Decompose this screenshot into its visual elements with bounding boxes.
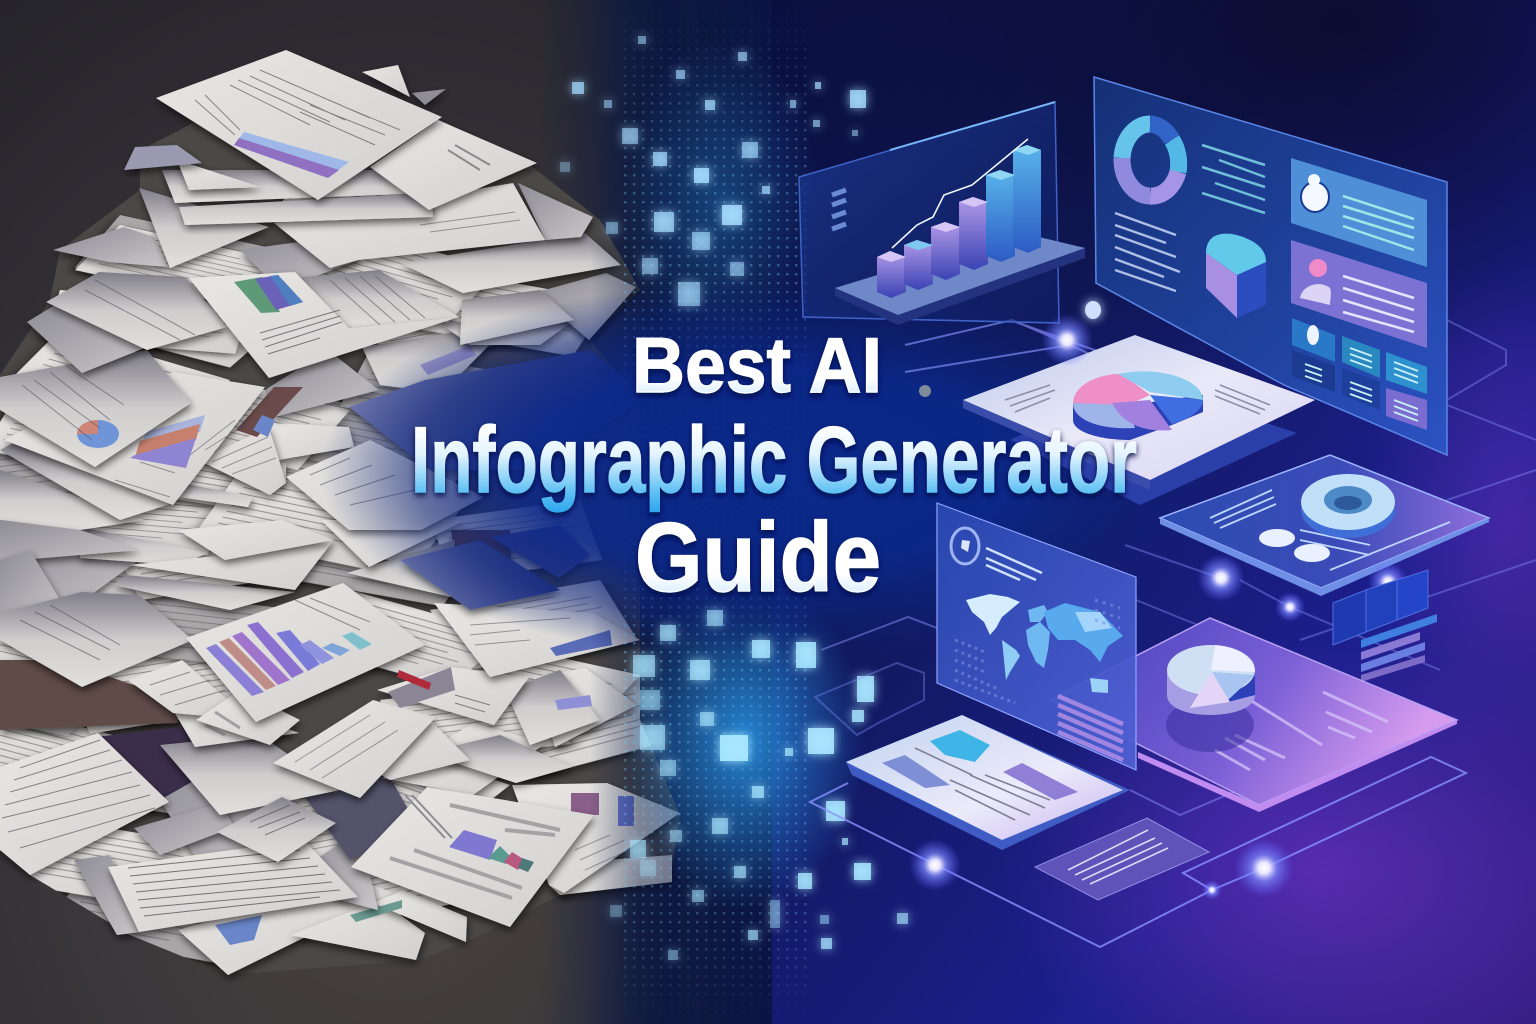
card text lines [1005,385,1270,414]
card text lines [1210,490,1450,570]
bars [877,145,1041,298]
panel: world map [937,503,1136,770]
mid band sheets [0,273,640,677]
node: upper pale dot [1085,301,1101,319]
sheet with text, lower left [0,733,169,875]
node: base glow right [1234,838,1294,898]
sheet with pie chart [0,350,191,467]
dotted rows [955,640,1015,703]
panel: pie chart card [963,335,1315,505]
dashboard backing [1094,77,1447,455]
dots upper right [1095,600,1120,628]
sheet with stripes behind pie sheet [4,372,265,505]
text lines [1202,145,1265,213]
mini chart blue [882,755,950,788]
dark red block, upper middle [451,530,512,590]
particles above title [560,36,866,306]
sheet with chart, top of pile [156,50,442,200]
small legend lines [832,190,846,229]
outline: frame under purple card [1130,725,1390,815]
panel: dashboard [1094,77,1447,455]
sheet with text, left [0,592,193,687]
title glow [320,280,1220,660]
panel: donut card [1160,455,1489,596]
dark mid sheets [217,797,336,862]
dark stack centre [300,760,420,860]
title [411,321,1137,612]
cylinder chart [1206,234,1266,318]
card top [963,335,1315,480]
node: glow lower [1275,592,1305,622]
title line 1: Best AI [632,321,882,409]
node: glow left of small bars [1197,554,1245,602]
node: base glow left [909,839,961,891]
circuit outlines, right side [810,320,1536,947]
floor sheets [74,830,672,975]
brown folder [0,660,178,730]
background: dark left side [0,0,780,1024]
card: purple profile [1291,240,1427,348]
stripes [1058,696,1123,760]
trend line [892,139,1028,248]
3D pie [1167,645,1255,715]
pie shadow [1166,698,1254,752]
sheet with green-blue chart [189,270,459,378]
filler sheets clipped to pile [0,175,692,965]
map pin badge [951,528,979,564]
card lower layer [1010,380,1297,505]
3D donut [1301,474,1395,538]
sheet with large bar chart [186,583,425,722]
title line 3: Guide [635,502,881,612]
bar chart backing panel [799,102,1059,323]
outline: large base frame [810,757,1466,947]
panel: small text card [1035,818,1209,900]
panel: purple card [1050,618,1457,812]
node: glow top of small panels [1368,562,1408,602]
node: grey dot [919,385,931,397]
dotted digital column [620,0,810,1024]
mini chart cyan [930,730,990,762]
panel: light card [846,715,1130,850]
title line 2: Infographic Generator [411,407,1137,512]
paper pile [0,50,692,975]
panel highlight edge [890,102,1055,150]
text lines, lower [1115,213,1180,291]
dark purple sheet [95,725,250,800]
platform [835,232,1085,325]
card: blue profile [1291,158,1427,267]
cyan glow upper centre [620,40,820,360]
node: bright junction upper [1041,314,1093,366]
lower tinted sheets under title [286,350,648,610]
sheets right of chart [274,183,636,345]
sheet with blue chart, lower right [351,787,594,927]
small vertical panels with bars [1333,570,1437,682]
blue transition band [540,0,772,1024]
soft fade of pile into the blue band [590,0,680,1024]
sheet bottom with text [108,840,358,932]
card text lines [915,748,1050,820]
donut chart [1122,124,1179,196]
lower middle stack [128,660,637,865]
heading lines [986,548,1042,580]
pie [1073,371,1203,440]
node: base junction [1202,880,1222,900]
cyan glow lower centre [625,570,865,910]
pile base [0,60,680,975]
outline: upper left frame [821,617,937,650]
stacked sheets under the top sheet [124,65,537,225]
outline: small left frames [815,663,924,735]
background: navy and purple right side [770,0,1536,1024]
mini chart colourful [1003,763,1078,800]
mini cells [1292,318,1427,430]
panel: bar chart [799,102,1085,325]
sheet with colour blocks, far right [512,783,680,893]
particles below title [610,610,908,960]
sheets upper left [27,188,358,373]
card text lines [1215,692,1388,770]
world map continents [966,594,1123,693]
white ovals [1259,529,1295,547]
outline: frame behind pie card [905,320,1225,410]
outline: right side frame [1125,320,1536,670]
